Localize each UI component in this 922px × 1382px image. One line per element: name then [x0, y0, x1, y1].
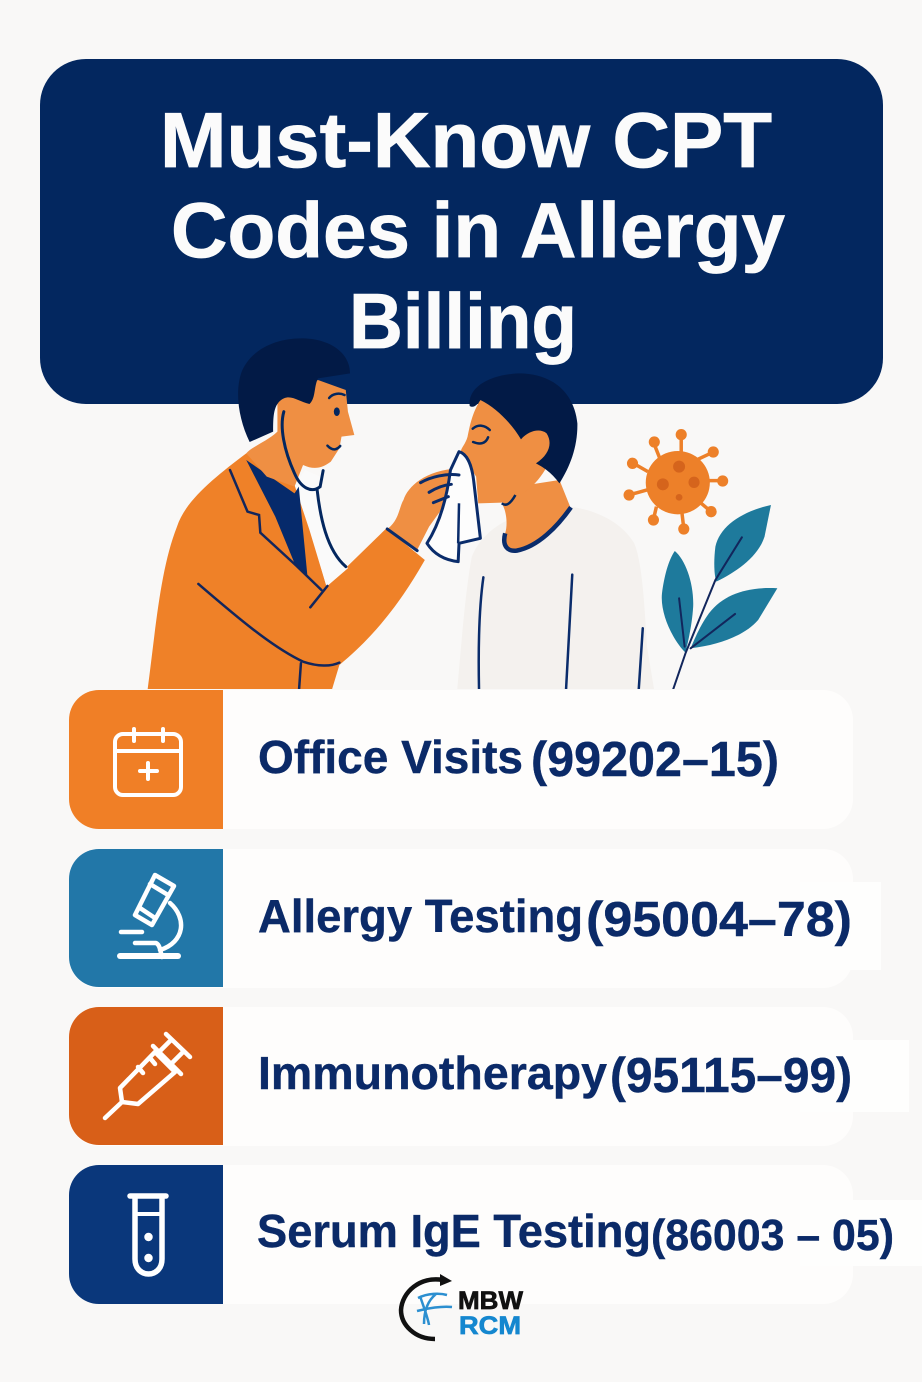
row: serum ige testing — [69, 1165, 922, 1304]
row: office visits — [69, 690, 853, 829]
label: office visits — [258, 731, 779, 787]
title text: Billing — [349, 277, 577, 365]
label: allergy testing — [258, 890, 852, 947]
logo: MBW RCM — [401, 1274, 523, 1340]
doctor — [147, 338, 425, 693]
label: immunotherapy: (95115–99) — [610, 1049, 852, 1103]
logo text: MBW — [458, 1287, 523, 1315]
label: allergy testing: (95004–78) — [586, 893, 852, 947]
label: immunotherapy — [258, 1047, 852, 1103]
row: immunotherapy — [69, 1007, 909, 1146]
label: office visits: (99202–15) — [531, 733, 779, 787]
label: immunotherapy: Immunotherapy — [258, 1047, 607, 1099]
colour tab: immunotherapy — [69, 1007, 223, 1145]
title text: Must-Know CPT — [160, 96, 772, 184]
row: allergy testing — [69, 849, 881, 988]
logo: MBW RCM: RCM — [459, 1312, 521, 1340]
label: serum ige testing — [257, 1205, 894, 1260]
illustration: doctor examining patient — [147, 338, 777, 693]
label: serum ige testing: (86003 – 05) — [651, 1211, 894, 1260]
label: office visits: Office Visits — [258, 731, 523, 783]
colour tab: allergy testing — [69, 849, 223, 987]
title text — [160, 96, 785, 365]
title text: Codes in Allergy — [171, 186, 785, 274]
patient — [457, 373, 655, 693]
colour tab: serum ige testing — [69, 1165, 223, 1304]
tissue and hand — [387, 452, 480, 562]
label: serum ige testing: Serum IgE Testing — [257, 1205, 651, 1257]
icon: calendar — [115, 729, 181, 795]
icon: allergen virus — [624, 429, 728, 535]
icon: test tube — [130, 1196, 166, 1274]
icon: syringe — [105, 1034, 190, 1118]
icon: globe with arrow — [401, 1274, 452, 1339]
icon: microscope — [120, 875, 181, 957]
label: allergy testing: Allergy Testing — [258, 890, 583, 942]
colour tab: office visits — [69, 690, 223, 829]
title banner — [40, 59, 883, 404]
icon: plant leaves — [662, 505, 777, 693]
